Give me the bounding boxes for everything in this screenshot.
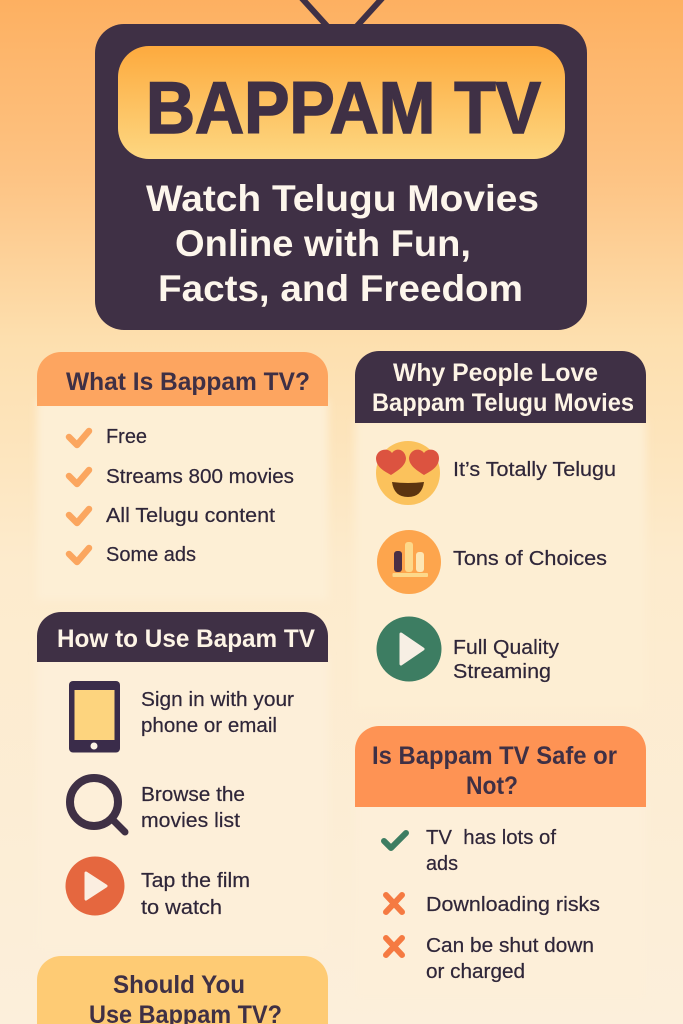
subtitle: Online with Fun, (175, 223, 471, 264)
step 3 text: Tap the film (141, 870, 250, 892)
list: Streams 800 movies (106, 466, 294, 488)
panel: what is bappam tv (37, 352, 328, 600)
icon: bars circle (377, 530, 441, 594)
panel: why people love (355, 351, 646, 710)
list: All Telugu content (106, 505, 275, 527)
panel: should you use (37, 956, 328, 1024)
step 1 text: Sign in with your (141, 689, 294, 711)
reason 2 text: Tons of Choices (453, 548, 607, 570)
icon: orange play (66, 856, 124, 916)
heading: Is Bappam TV Safe or (372, 742, 617, 770)
heading (372, 359, 634, 417)
step 2 text: Browse the (141, 784, 245, 806)
reason 3 text: Full Quality (453, 637, 559, 659)
safety point 3: or charged (426, 961, 525, 983)
icon: heart eyes emoji (376, 441, 440, 505)
panel body (37, 655, 328, 950)
heading band (37, 612, 328, 662)
heading: Bappam Telugu Movies (372, 389, 634, 417)
reason 1 text: It’s Totally Telugu (453, 459, 616, 481)
reason 3 text: Streaming (453, 661, 551, 683)
heading band (355, 726, 646, 807)
step 3 text: to watch (141, 897, 222, 919)
list (106, 426, 294, 566)
heading: Why People Love (393, 359, 598, 387)
icon: green check (384, 833, 406, 848)
icon: cross 1 (386, 895, 402, 912)
heading band (37, 956, 328, 1024)
safety point 1 (426, 827, 556, 875)
heading band (37, 352, 328, 406)
icon: cross 2 (386, 938, 402, 955)
heading: Should You (113, 971, 245, 999)
step 2 text (141, 784, 245, 832)
tv body (95, 24, 587, 330)
panel: is bappam tv safe (355, 726, 646, 1000)
step 1 text (141, 689, 294, 737)
step 2 text: movies list (141, 810, 240, 832)
title screen (118, 46, 565, 159)
subtitle: Watch Telugu Movies (146, 178, 539, 219)
safety point 1: ads (426, 853, 458, 875)
heading: Not? (466, 772, 518, 800)
step 3 text (141, 870, 250, 919)
icon: antenna (298, 0, 386, 26)
icon: tablet (69, 681, 120, 752)
check icons (69, 431, 89, 562)
reason 3 text (453, 637, 559, 683)
safety point 1: TV has lots of (426, 827, 556, 849)
safety point 2: Downloading risks (426, 894, 600, 916)
panel body (37, 400, 328, 600)
icon: magnifier (70, 778, 125, 832)
heading band (355, 351, 646, 423)
list: Free (106, 426, 147, 448)
subtitle (146, 178, 539, 309)
title: BAPPAM TV (146, 68, 541, 149)
subtitle: Facts, and Freedom (158, 268, 523, 309)
panel body (355, 420, 646, 710)
panel: how to use (37, 612, 328, 950)
panel body (355, 800, 646, 1000)
heading: How to Use Bapam TV (57, 625, 315, 653)
list: Some ads (106, 544, 196, 566)
safety point 3: Can be shut down (426, 935, 594, 957)
tv header (95, 0, 587, 330)
icon: green play (376, 616, 442, 682)
heading (89, 971, 282, 1024)
step 1 text: phone or email (141, 715, 277, 737)
safety point 3 (426, 935, 594, 983)
heading (372, 742, 617, 800)
heading: What Is Bappam TV? (66, 368, 310, 396)
